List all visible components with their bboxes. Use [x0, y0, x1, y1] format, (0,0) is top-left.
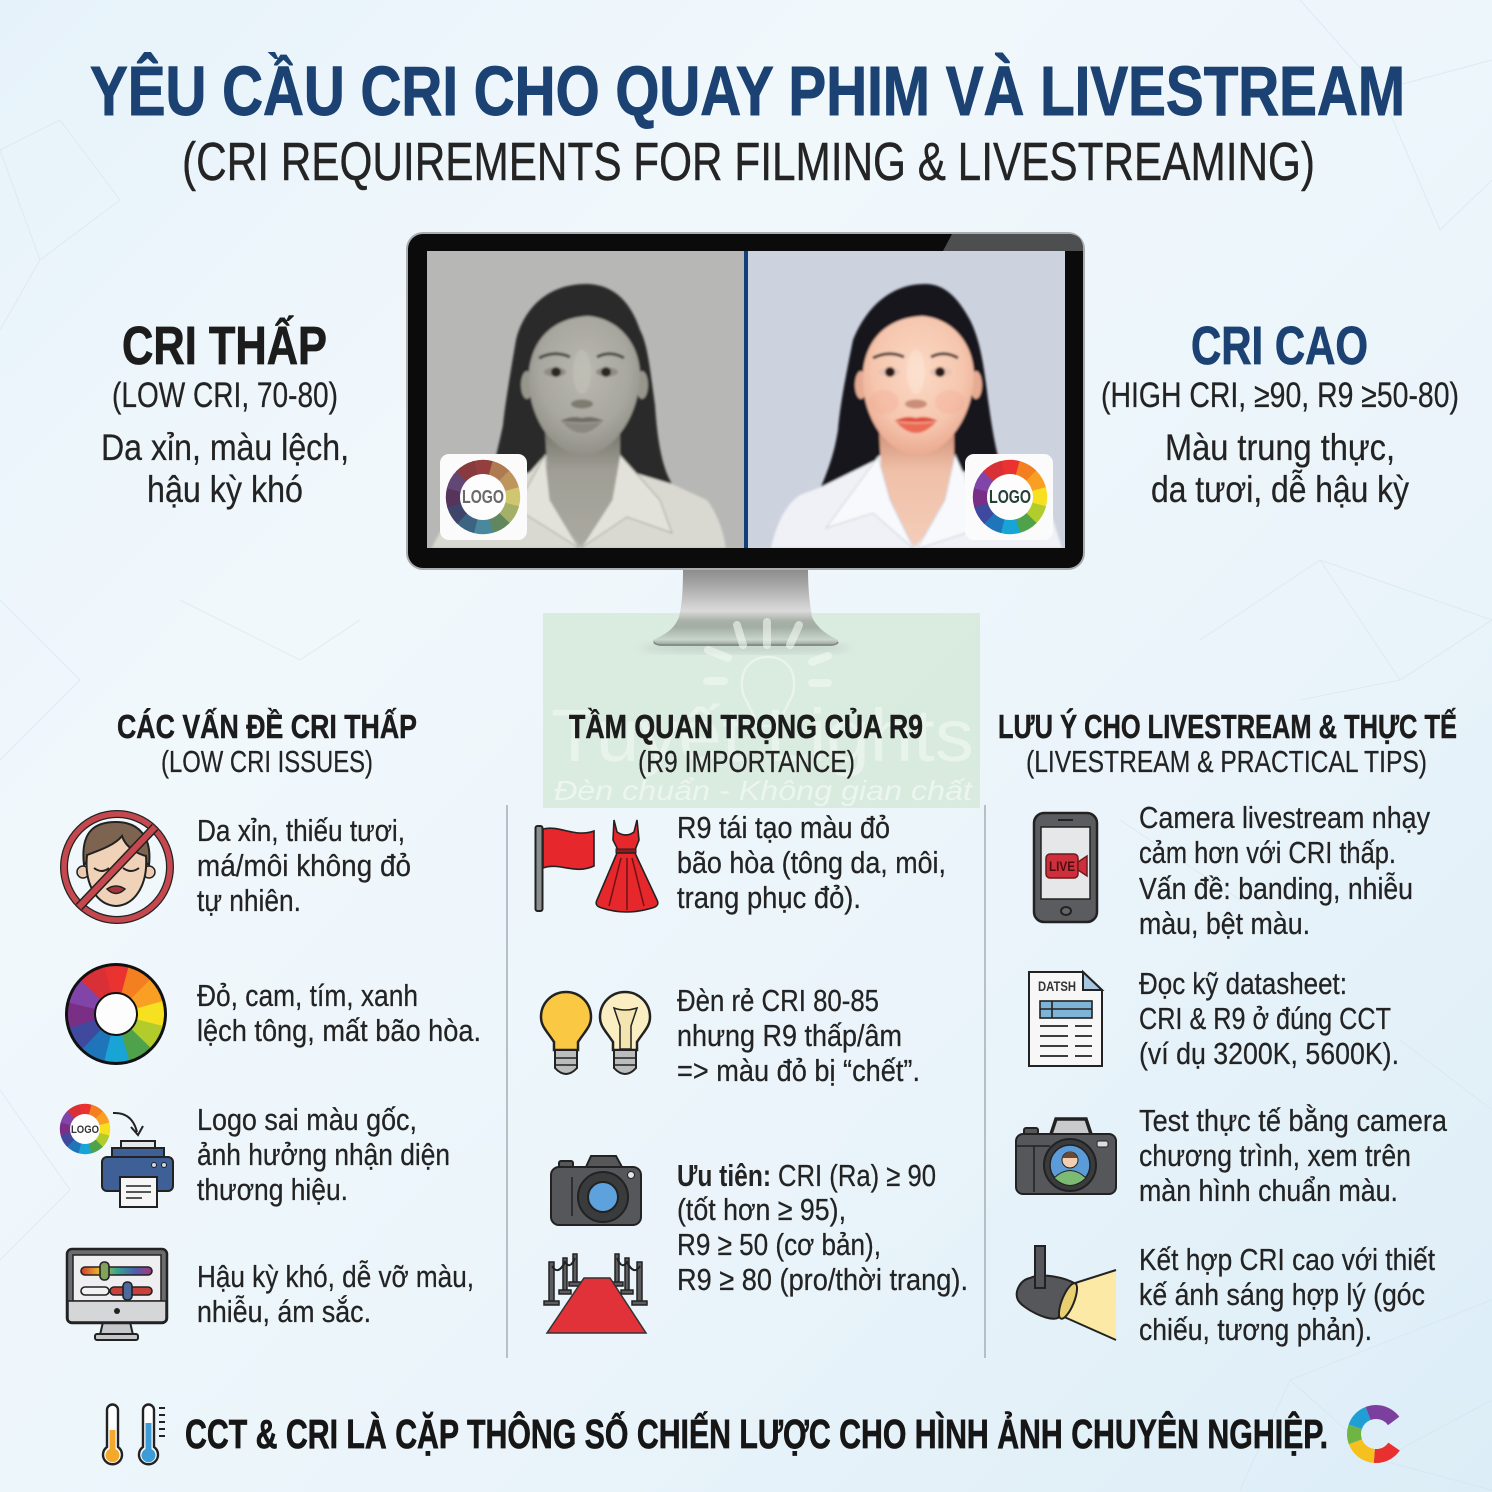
text: logo — [197, 1102, 450, 1207]
text: cheap bulbs — [677, 983, 920, 1088]
label: high CRI: CRI CAO — [1191, 316, 1368, 376]
label: low CRI: Da xỉn, màu lệch, — [101, 427, 349, 468]
heading: R9 importance: (R9 IMPORTANCE) — [638, 744, 855, 779]
text: R9 red: trang phục đỏ). — [677, 880, 861, 915]
text: priority — [677, 1158, 968, 1297]
icon: camera with person — [1016, 1119, 1116, 1194]
icon: thermometers — [103, 1404, 165, 1464]
text: cheap bulbs: => màu đỏ bị “chết”. — [677, 1053, 920, 1088]
text: priority: (tốt hơn ≥ 95), — [677, 1192, 846, 1227]
text: logo: ảnh hưởng nhận diện — [197, 1137, 450, 1172]
panel: low CRI issues — [64, 708, 481, 1340]
text: test: chương trình, xem trên — [1139, 1138, 1411, 1173]
text: test: màn hình chuẩn màu. — [1139, 1173, 1398, 1208]
text: skin: Da xỉn, thiếu tươi, — [197, 813, 405, 848]
monitor frame — [406, 232, 1085, 570]
footer — [103, 1404, 1398, 1464]
icon: logo to printer: LOGO — [71, 1124, 99, 1136]
text: datasheet: CRI & R9 ở đúng CCT — [1139, 1001, 1391, 1036]
text: colours: lệch tông, mất bão hòa. — [197, 1013, 481, 1048]
text: skin: tự nhiên. — [197, 883, 301, 918]
heading: low CRI issues: CÁC VẤN ĐỀ CRI THẤP — [117, 708, 417, 745]
text: cheap bulbs: nhưng R9 thấp/âm — [677, 1018, 902, 1053]
text: combine: chiếu, tương phản). — [1139, 1312, 1372, 1347]
text: post-production — [197, 1259, 474, 1329]
heading: R9 importance — [569, 708, 923, 779]
logo card: vivid: LOGO — [989, 487, 1031, 507]
text: skin: má/môi không đỏ — [197, 848, 411, 883]
watermark — [543, 613, 980, 808]
text: logo: thương hiệu. — [197, 1172, 348, 1207]
logo card: muted — [440, 454, 527, 540]
icon: monitor with sliders — [67, 1249, 167, 1340]
heading: low CRI issues — [117, 708, 417, 779]
icon: flag and dress — [536, 820, 658, 912]
monitor — [406, 232, 1085, 653]
icon: datasheet: DATSH — [1038, 978, 1076, 994]
icon: spotlight — [1017, 1246, 1116, 1340]
label: low CRI: (LOW CRI, 70-80) — [112, 376, 338, 415]
right screen: high CRI portrait — [748, 251, 1066, 550]
logo card: vivid — [965, 454, 1053, 540]
watermark: Tuyết Lights — [551, 694, 974, 777]
text: combine: Kết hợp CRI cao với thiết — [1139, 1242, 1435, 1277]
text: R9 red — [677, 810, 946, 915]
text: post-production: nhiễu, ám sắc. — [197, 1294, 371, 1329]
watermark: Đèn chuẩn - Không gian chất — [554, 775, 973, 806]
heading: low CRI issues: (LOW CRI ISSUES) — [161, 744, 373, 779]
heading: R9 importance: TẦM QUAN TRỌNG CỦA R9 — [569, 708, 923, 745]
text: cheap bulbs: Đèn rẻ CRI 80-85 — [677, 983, 879, 1018]
text: camera sensitive: Camera livestream nhạy — [1139, 800, 1430, 835]
watermark bulb — [707, 622, 828, 726]
icon: red carpet — [544, 1254, 647, 1333]
icon: camera — [551, 1156, 641, 1225]
label: low CRI: CRI THẤP — [122, 316, 327, 376]
text: datasheet — [1139, 966, 1399, 1071]
icon: phone live — [1034, 813, 1097, 922]
icon: no natural face — [64, 814, 170, 920]
text: colours — [197, 978, 481, 1048]
label: high CRI: da tươi, dễ hậu kỳ — [1151, 469, 1409, 510]
icon: color wheel — [65, 963, 167, 1065]
icon: logo to printer — [70, 1113, 173, 1207]
label: low CRI — [101, 316, 349, 510]
text: priority: Ưu tiên: — [677, 1158, 771, 1193]
text: priority: R9 ≥ 50 (cơ bản), — [677, 1227, 881, 1262]
text: skin — [197, 813, 411, 918]
text: camera sensitive: cảm hơn với CRI thấp. — [1139, 835, 1396, 870]
text: post-production: Hậu kỳ khó, dễ vỡ màu, — [197, 1259, 474, 1294]
text: camera sensitive — [1139, 800, 1430, 941]
label: low CRI: hậu kỳ khó — [147, 469, 303, 510]
label: high CRI: Màu trung thực, — [1165, 427, 1395, 468]
text: priority: R9 ≥ 80 (pro/thời trang). — [677, 1262, 968, 1297]
text: priority: CRI (Ra) ≥ 90 — [778, 1158, 936, 1193]
text: logo: Logo sai màu gốc, — [197, 1102, 417, 1137]
text: camera sensitive: Vấn đề: banding, nhiễu — [1139, 871, 1413, 906]
text: test: Test thực tế bằng camera — [1139, 1103, 1448, 1138]
text: combine — [1139, 1242, 1435, 1347]
logo card: muted: LOGO — [462, 487, 504, 507]
panel: R9 importance — [536, 708, 968, 1333]
label: high CRI — [1101, 316, 1459, 510]
text: combine: kế ánh sáng hợp lý (góc — [1139, 1277, 1425, 1312]
text: camera sensitive: màu, bệt màu. — [1139, 906, 1310, 941]
left screen: low CRI portrait — [427, 251, 745, 550]
screen divider — [744, 251, 748, 548]
column dividers — [507, 805, 985, 1358]
icon: C logo — [1354, 1412, 1398, 1456]
heading: livestream tips — [998, 708, 1457, 779]
panel: livestream tips — [998, 708, 1457, 1347]
text: test — [1139, 1103, 1448, 1208]
text: datasheet: Đọc kỹ datasheet: — [1139, 966, 1347, 1001]
icon: bulbs — [541, 992, 650, 1074]
monitor stand — [640, 568, 850, 653]
text: R9 red: bão hòa (tông da, môi, — [677, 845, 946, 880]
text: colours: Đỏ, cam, tím, xanh — [197, 978, 418, 1013]
icon: datasheet — [1029, 972, 1102, 1066]
text: R9 red: R9 tái tạo màu đỏ — [677, 810, 890, 845]
text: datasheet: (ví dụ 3200K, 5600K). — [1139, 1036, 1399, 1071]
icon: phone live: LIVE — [1049, 858, 1075, 874]
